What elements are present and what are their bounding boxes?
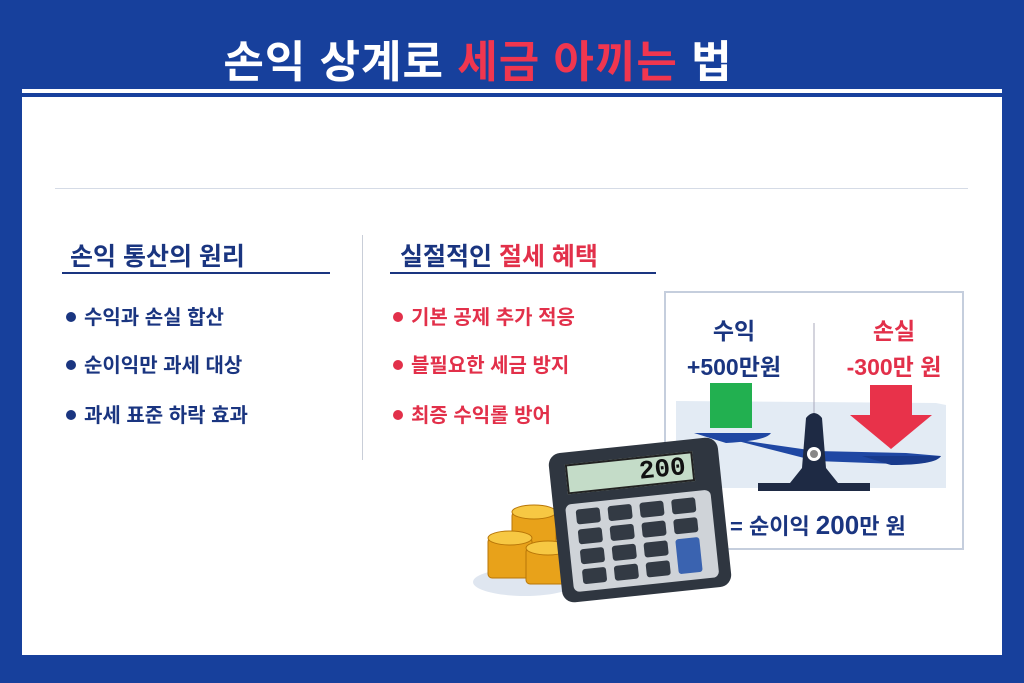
profit label: +500만원 — [687, 354, 781, 380]
calculator — [548, 437, 732, 603]
left bullets: 과세 표준 하락 효과 — [84, 405, 248, 427]
profit label — [687, 318, 781, 380]
loss label: 손실 — [873, 318, 915, 344]
left bullets — [66, 307, 248, 427]
result: = 순이익 200만 원 — [730, 510, 906, 540]
loss label — [847, 318, 941, 380]
panel: right heading — [390, 237, 656, 274]
scale box — [664, 291, 964, 550]
profit label: 수익 — [713, 318, 755, 344]
right bullets: 블필요한 세금 방지 — [411, 355, 569, 377]
coins — [473, 504, 562, 596]
calculator: 200 — [638, 452, 687, 487]
panel: left heading — [62, 237, 330, 274]
right bullets: 최증 수익롤 방어 — [411, 405, 551, 427]
white panel — [22, 89, 1002, 655]
panel: right heading: 실절적인 절세 혜택 — [400, 243, 598, 271]
right bullets — [393, 307, 575, 427]
left bullets: 순이익만 과세 대상 — [84, 355, 242, 377]
loss label: -300만 원 — [847, 354, 941, 380]
right bullets: 기본 공제 추가 적응 — [411, 307, 575, 329]
panel: left heading: 손익 통산의 원리 — [70, 243, 245, 271]
red arrow — [850, 385, 932, 449]
title: 손익 상계로 세금 아끼는 법 — [223, 38, 733, 87]
green block — [710, 383, 752, 428]
left bullets: 수익과 손실 합산 — [84, 307, 224, 329]
